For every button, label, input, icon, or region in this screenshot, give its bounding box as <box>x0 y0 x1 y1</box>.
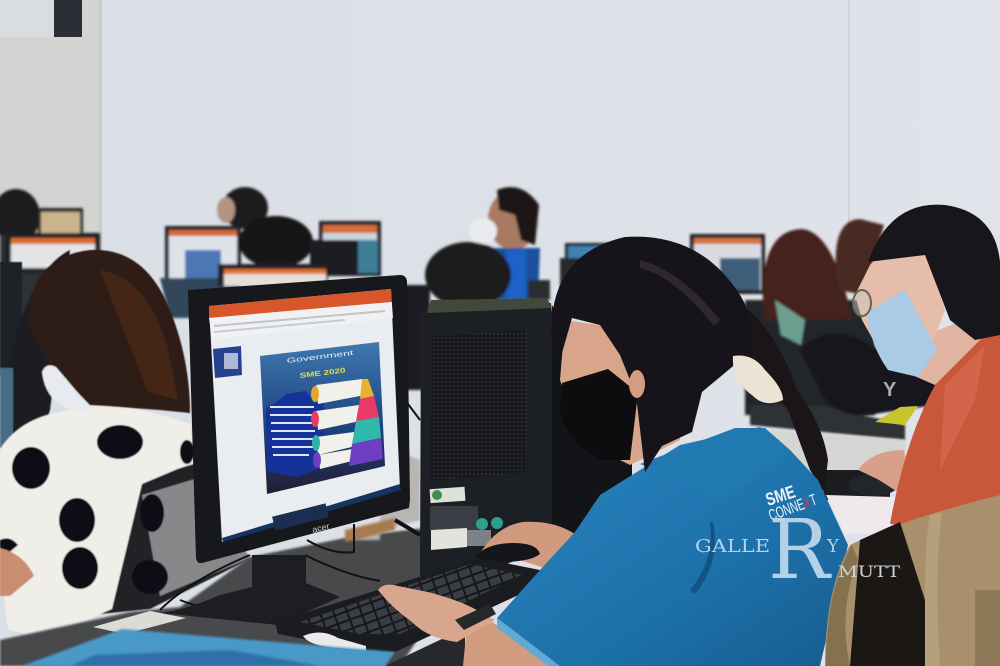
watermark: Gallery RMUTT: MUTT <box>838 562 900 581</box>
cables <box>160 400 420 610</box>
shirt <box>890 325 1000 525</box>
brand: acer <box>311 521 330 535</box>
back student with glasses <box>217 187 268 229</box>
title bar <box>209 289 392 318</box>
back student far left <box>0 189 40 243</box>
ear <box>629 370 645 398</box>
taskbar <box>222 484 401 542</box>
back student dark hair <box>239 216 313 268</box>
main monitor: SME 2020 <box>299 367 346 380</box>
thumbnail <box>213 346 242 378</box>
slide text block <box>266 391 324 477</box>
neck and face <box>560 320 700 465</box>
right background: desk, bag and paper <box>750 334 940 534</box>
face mask <box>42 365 90 412</box>
mouse and mat <box>820 470 890 500</box>
shirt logo text: CONNEXT <box>767 492 819 525</box>
desktop tower computer <box>420 298 632 578</box>
monitor behind main <box>218 264 328 286</box>
main monitor <box>160 275 410 625</box>
surgical mask <box>867 290 937 377</box>
tower sticker labels <box>430 487 503 550</box>
central woman with blue polo shirt <box>378 237 848 666</box>
watermark: Gallery RMUTT: Y <box>826 536 840 557</box>
watch <box>455 604 496 630</box>
glasses <box>853 290 871 316</box>
collar <box>640 428 790 505</box>
tablet foreground blue <box>22 629 395 666</box>
dark strip behind monitor <box>395 285 430 390</box>
neck <box>912 315 985 385</box>
watermark: Gallery RMUTT: R <box>768 503 832 598</box>
slide heading: Government <box>286 350 354 365</box>
monitor bezel <box>188 275 410 563</box>
black cap bag <box>800 334 940 416</box>
keyboard <box>275 558 540 652</box>
shirt <box>0 406 194 639</box>
small white item on keyboard edge <box>303 632 366 651</box>
brown-haired women at right <box>763 219 884 345</box>
person and dark clothes behind ponytail <box>745 300 875 415</box>
white paper <box>826 495 895 534</box>
arm <box>0 548 34 596</box>
right woman with orange shirt <box>853 205 1000 525</box>
back monitor small left <box>38 208 83 238</box>
slide pyramid <box>349 379 383 466</box>
back row of monitors and students <box>0 187 884 415</box>
ponytail <box>728 300 828 492</box>
back monitor centre <box>319 221 381 276</box>
mouse <box>475 543 540 562</box>
scrunchie <box>733 356 783 403</box>
back monitor blue <box>560 243 609 288</box>
right background: desk, bag and paper: Y <box>883 379 897 401</box>
screen <box>209 289 400 542</box>
back monitor centre left <box>165 226 241 284</box>
desk and surfaces <box>0 450 480 666</box>
hair <box>551 237 751 472</box>
shirt logo text: SME <box>763 482 798 510</box>
standing man in mask <box>469 187 550 300</box>
right hand on mouse <box>481 522 575 570</box>
hair <box>28 250 190 413</box>
hair <box>868 205 1000 340</box>
yellow book <box>875 406 918 425</box>
woman behind tower <box>425 242 511 308</box>
back monitor left <box>5 233 100 273</box>
ribbon <box>209 302 393 340</box>
left foreground woman with polka dot shirt <box>0 250 250 639</box>
hand <box>858 450 908 496</box>
watermark: Gallery RMUTT: GALLE <box>695 536 770 557</box>
phone and paper on desk <box>93 611 186 634</box>
office chair back <box>90 464 250 615</box>
face <box>855 249 945 375</box>
black face mask <box>560 369 638 460</box>
arm <box>463 622 556 666</box>
polo shirt <box>497 427 848 666</box>
beige jacket on chair, bottom right <box>825 495 1000 666</box>
slide list bars <box>311 379 365 469</box>
back monitor right <box>690 234 765 294</box>
monitor stand <box>160 555 340 625</box>
watermark: Gallery RMUTT <box>695 503 900 598</box>
left hand on keyboard <box>378 585 495 642</box>
slide <box>260 342 385 494</box>
